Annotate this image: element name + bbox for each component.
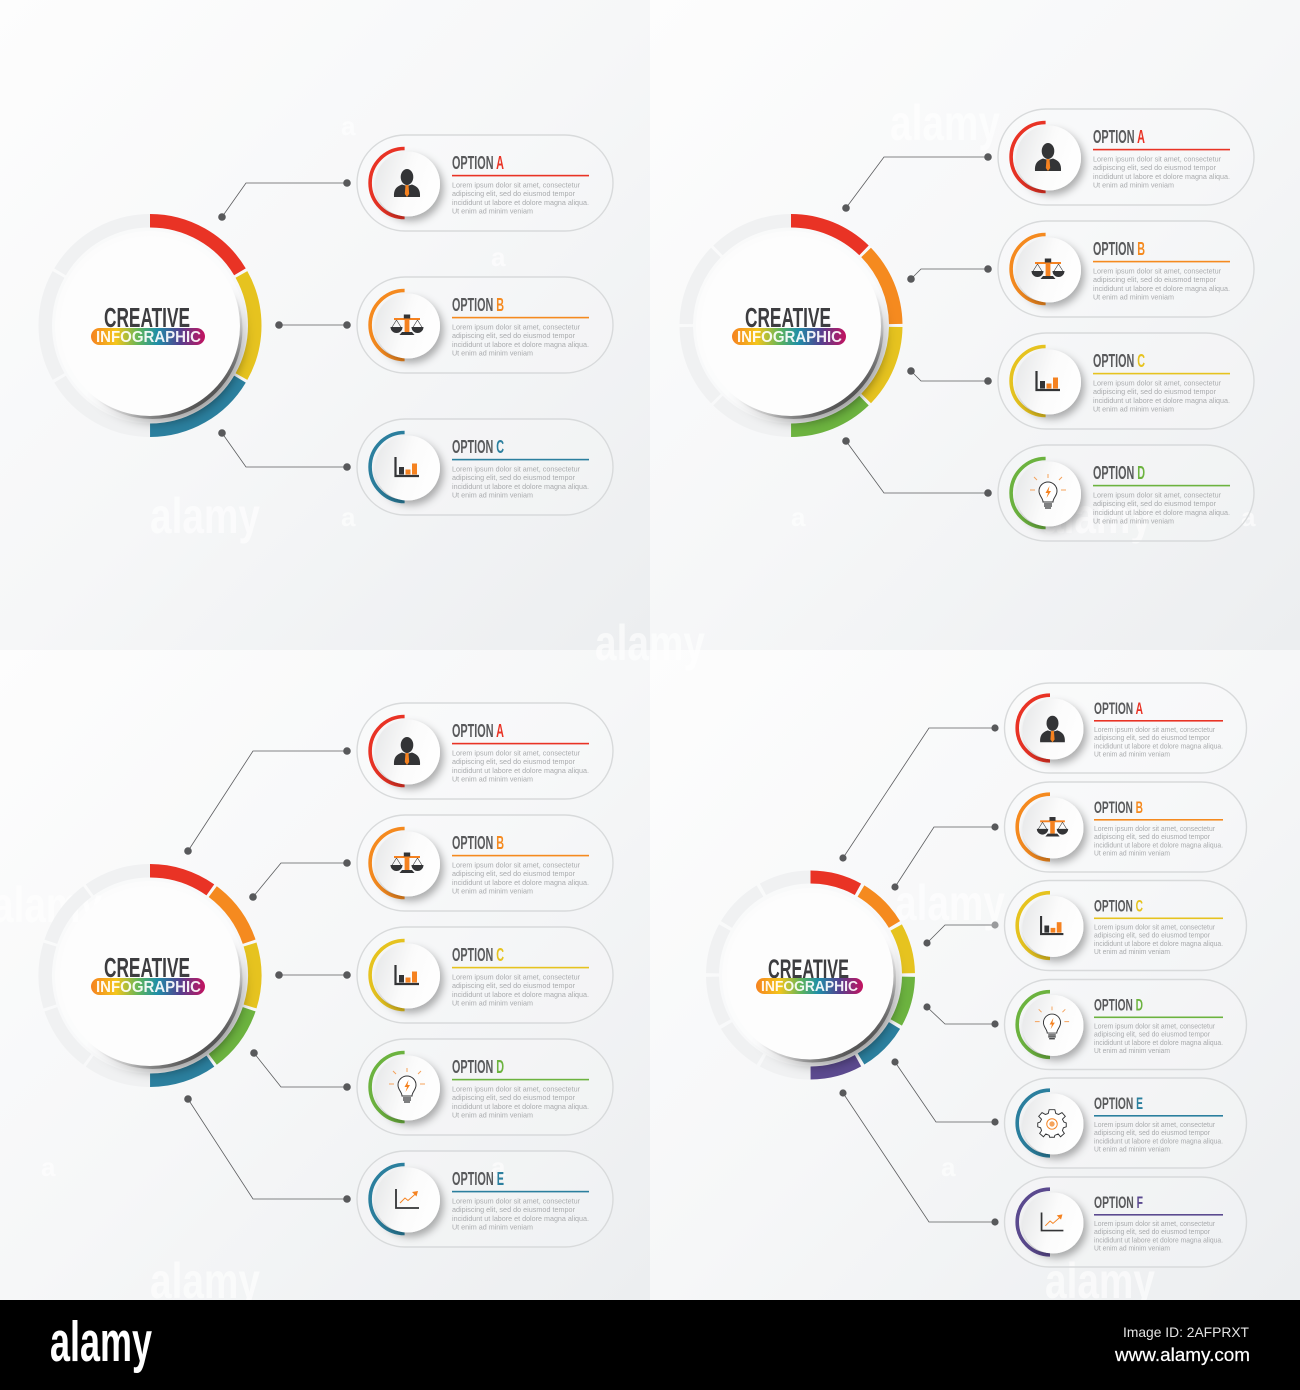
panel: four options <box>643 109 1254 541</box>
option C: Ut enim ad minim veniam <box>452 491 533 500</box>
title: creative infographic: CREATIVE <box>104 952 190 983</box>
leader lines <box>842 153 992 497</box>
option D: Ut enim ad minim veniam <box>1093 517 1174 526</box>
option C: adipiscing elit, sed do eiusmod tempor <box>1093 387 1217 396</box>
option B <box>357 815 613 911</box>
option B: Ut enim ad minim veniam <box>1094 851 1170 858</box>
panel: five options <box>3 703 613 1247</box>
option A: Lorem ipsum dolor sit amet, consectetur <box>452 180 581 190</box>
watermarks: a <box>41 1152 56 1182</box>
option F <box>1004 1177 1246 1267</box>
option D: Lorem ipsum dolor sit amet, consectetur <box>452 1084 581 1094</box>
title: creative infographic: INFOGRAPHIC <box>737 329 842 346</box>
leader lines <box>184 747 351 1203</box>
option A: OPTION A <box>1093 127 1145 147</box>
title: creative infographic <box>91 952 205 996</box>
segmented ring <box>6 182 294 469</box>
option C: OPTION C <box>1093 351 1145 371</box>
option D: OPTION D <box>452 1057 504 1077</box>
title: creative infographic: INFOGRAPHIC <box>96 979 201 996</box>
option B: adipiscing elit, sed do eiusmod tempor <box>452 331 576 340</box>
option A: incididunt ut labore et dolore magna aliqua. <box>452 198 589 207</box>
option C: adipiscing elit, sed do eiusmod tempor <box>452 981 576 990</box>
watermarks: a <box>341 111 356 141</box>
option F: Ut enim ad minim veniam <box>1094 1246 1170 1253</box>
option B: incididunt ut labore et dolore magna aliqua. <box>1093 284 1230 293</box>
watermarks: alamy <box>150 488 260 544</box>
option D <box>998 445 1254 541</box>
option D: adipiscing elit, sed do eiusmod tempor <box>1093 499 1217 508</box>
watermarks: alamy <box>895 875 1005 931</box>
option F: OPTION F <box>1094 1193 1143 1212</box>
title: creative infographic <box>732 302 846 346</box>
option B: adipiscing elit, sed do eiusmod tempor <box>452 869 576 878</box>
watermarks: alamy <box>1045 1253 1155 1309</box>
option B: adipiscing elit, sed do eiusmod tempor <box>1093 275 1217 284</box>
option B <box>357 277 613 373</box>
option D: adipiscing elit, sed do eiusmod tempor <box>1094 1032 1211 1039</box>
option C: Lorem ipsum dolor sit amet, consectetur <box>1094 924 1216 932</box>
option B: incididunt ut labore et dolore magna aliqua. <box>452 340 589 349</box>
title: creative infographic: CREATIVE <box>745 302 831 333</box>
option A: Lorem ipsum dolor sit amet, consectetur <box>1093 154 1222 164</box>
option A: Ut enim ad minim veniam <box>452 775 533 784</box>
option C: OPTION C <box>452 437 504 457</box>
option B: OPTION B <box>452 833 504 853</box>
website: www.alamy.com <box>1114 1345 1250 1365</box>
watermarks: alamy <box>1042 488 1152 544</box>
option E: incididunt ut labore et dolore magna aliqua. <box>1094 1138 1223 1145</box>
option A: OPTION A <box>452 721 504 741</box>
option C: Ut enim ad minim veniam <box>452 999 533 1008</box>
option A: incididunt ut labore et dolore magna aliqua. <box>452 766 589 775</box>
watermarks: a <box>491 242 506 272</box>
option C: incididunt ut labore et dolore magna aliqua. <box>452 482 589 491</box>
option A: OPTION A <box>452 153 504 173</box>
option F: Lorem ipsum dolor sit amet, consectetur <box>1094 1221 1216 1228</box>
option C: incididunt ut labore et dolore magna aliqua. <box>1093 396 1230 405</box>
option A: Ut enim ad minim veniam <box>452 207 533 216</box>
alamy logo: alamy <box>50 1310 152 1374</box>
option A: Ut enim ad minim veniam <box>1093 181 1174 190</box>
option B: Ut enim ad minim veniam <box>452 887 533 896</box>
option D <box>357 1039 613 1135</box>
option E: Lorem ipsum dolor sit amet, consectetur <box>452 1196 581 1206</box>
central circle <box>55 231 246 423</box>
option A: Lorem ipsum dolor sit amet, consectetur <box>452 748 581 758</box>
title: creative infographic: INFOGRAPHIC <box>96 329 201 346</box>
option E: OPTION E <box>452 1169 504 1189</box>
option D: incididunt ut labore et dolore magna aliqua. <box>1094 1040 1223 1047</box>
panel: six options <box>676 683 1246 1267</box>
option C: Ut enim ad minim veniam <box>1094 949 1170 956</box>
option E: adipiscing elit, sed do eiusmod tempor <box>452 1205 576 1214</box>
option D: adipiscing elit, sed do eiusmod tempor <box>452 1093 576 1102</box>
central circle <box>55 881 246 1073</box>
option B: Lorem ipsum dolor sit amet, consectetur <box>1093 266 1222 276</box>
option D: Lorem ipsum dolor sit amet, consectetur <box>1093 490 1222 500</box>
watermarks: a <box>941 1152 956 1182</box>
option E: Lorem ipsum dolor sit amet, consectetur <box>1094 1122 1216 1129</box>
option A: Lorem ipsum dolor sit amet, consectetur <box>1094 727 1216 734</box>
watermarks: a <box>1241 502 1256 532</box>
option A: adipiscing elit, sed do eiusmod tempor <box>1094 735 1211 742</box>
watermarks: alamy <box>890 95 1000 151</box>
watermarks: alamy <box>595 615 705 671</box>
central circle <box>696 231 887 423</box>
option A <box>357 135 613 231</box>
watermarks: a <box>341 502 356 532</box>
option B: OPTION B <box>1093 239 1145 259</box>
option B: adipiscing elit, sed do eiusmod tempor <box>1094 834 1211 841</box>
option B: Ut enim ad minim veniam <box>1093 293 1174 302</box>
option C: incididunt ut labore et dolore magna aliqua. <box>452 990 589 999</box>
option A <box>1004 683 1246 773</box>
option B: Lorem ipsum dolor sit amet, consectetur <box>452 322 581 332</box>
title: creative infographic: INFOGRAPHIC <box>761 979 859 995</box>
option B: incididunt ut labore et dolore magna aliqua. <box>452 878 589 887</box>
option E: adipiscing elit, sed do eiusmod tempor <box>1094 1130 1211 1137</box>
option D <box>1004 980 1246 1070</box>
option A: adipiscing elit, sed do eiusmod tempor <box>452 189 576 198</box>
watermarks: a <box>791 502 806 532</box>
option B: Ut enim ad minim veniam <box>452 349 533 358</box>
image id: Image ID: 2AFPRXT <box>1123 1324 1249 1340</box>
option E: incididunt ut labore et dolore magna aliqua. <box>452 1214 589 1223</box>
option C: Lorem ipsum dolor sit amet, consectetur <box>1093 378 1222 388</box>
option A <box>357 703 613 799</box>
leader lines <box>218 179 351 471</box>
segmented ring <box>643 177 939 474</box>
option B: Lorem ipsum dolor sit amet, consectetur <box>452 860 581 870</box>
option A: OPTION A <box>1094 699 1143 718</box>
option C <box>357 927 613 1023</box>
title: creative infographic: CREATIVE <box>768 954 849 984</box>
panel: three options <box>6 135 613 515</box>
option C: Lorem ipsum dolor sit amet, consectetur <box>452 464 581 474</box>
leader lines <box>839 724 999 1226</box>
option B: OPTION B <box>1094 798 1143 817</box>
option C <box>998 333 1254 429</box>
option B: Lorem ipsum dolor sit amet, consectetur <box>1094 826 1216 833</box>
option C: incididunt ut labore et dolore magna aliqua. <box>1094 941 1223 948</box>
title: creative infographic: CREATIVE <box>104 302 190 333</box>
option D: OPTION D <box>1093 463 1145 483</box>
title: creative infographic <box>91 302 205 346</box>
option E: OPTION E <box>1094 1094 1143 1113</box>
option E: Ut enim ad minim veniam <box>452 1223 533 1232</box>
option A <box>998 109 1254 205</box>
title: creative infographic <box>756 954 863 995</box>
option A: incididunt ut labore et dolore magna aliqua. <box>1093 172 1230 181</box>
option E: Ut enim ad minim veniam <box>1094 1147 1170 1154</box>
option B <box>1004 782 1246 872</box>
option E <box>1004 1078 1246 1168</box>
watermarks: a <box>491 1152 506 1182</box>
option C <box>357 419 613 515</box>
option C <box>1004 880 1246 970</box>
segmented ring <box>3 829 297 1122</box>
option C: Lorem ipsum dolor sit amet, consectetur <box>452 972 581 982</box>
option C: OPTION C <box>452 945 504 965</box>
option A: Ut enim ad minim veniam <box>1094 752 1170 759</box>
option C: adipiscing elit, sed do eiusmod tempor <box>452 473 576 482</box>
option A: adipiscing elit, sed do eiusmod tempor <box>1093 163 1217 172</box>
option B: OPTION B <box>452 295 504 315</box>
watermarks: alamy <box>150 1253 260 1309</box>
option D: incididunt ut labore et dolore magna aliqua. <box>452 1102 589 1111</box>
option F: incididunt ut labore et dolore magna aliqua. <box>1094 1237 1223 1244</box>
option C: adipiscing elit, sed do eiusmod tempor <box>1094 933 1211 940</box>
option B <box>998 221 1254 317</box>
option A: adipiscing elit, sed do eiusmod tempor <box>452 757 576 766</box>
option D: incididunt ut labore et dolore magna aliqua. <box>1093 508 1230 517</box>
option C: OPTION C <box>1094 896 1143 916</box>
option B: incididunt ut labore et dolore magna aliqua. <box>1094 842 1223 849</box>
segmented ring <box>676 841 945 1109</box>
footer bar <box>0 1300 1300 1390</box>
option A: incididunt ut labore et dolore magna aliqua. <box>1094 743 1223 750</box>
option F: adipiscing elit, sed do eiusmod tempor <box>1094 1229 1211 1236</box>
option D: Lorem ipsum dolor sit amet, consectetur <box>1094 1024 1216 1030</box>
option C: Ut enim ad minim veniam <box>1093 405 1174 414</box>
option D: Ut enim ad minim veniam <box>1094 1048 1170 1055</box>
option D: OPTION D <box>1094 996 1143 1014</box>
option D: Ut enim ad minim veniam <box>452 1111 533 1120</box>
option E <box>357 1151 613 1247</box>
central circle <box>722 888 900 1066</box>
